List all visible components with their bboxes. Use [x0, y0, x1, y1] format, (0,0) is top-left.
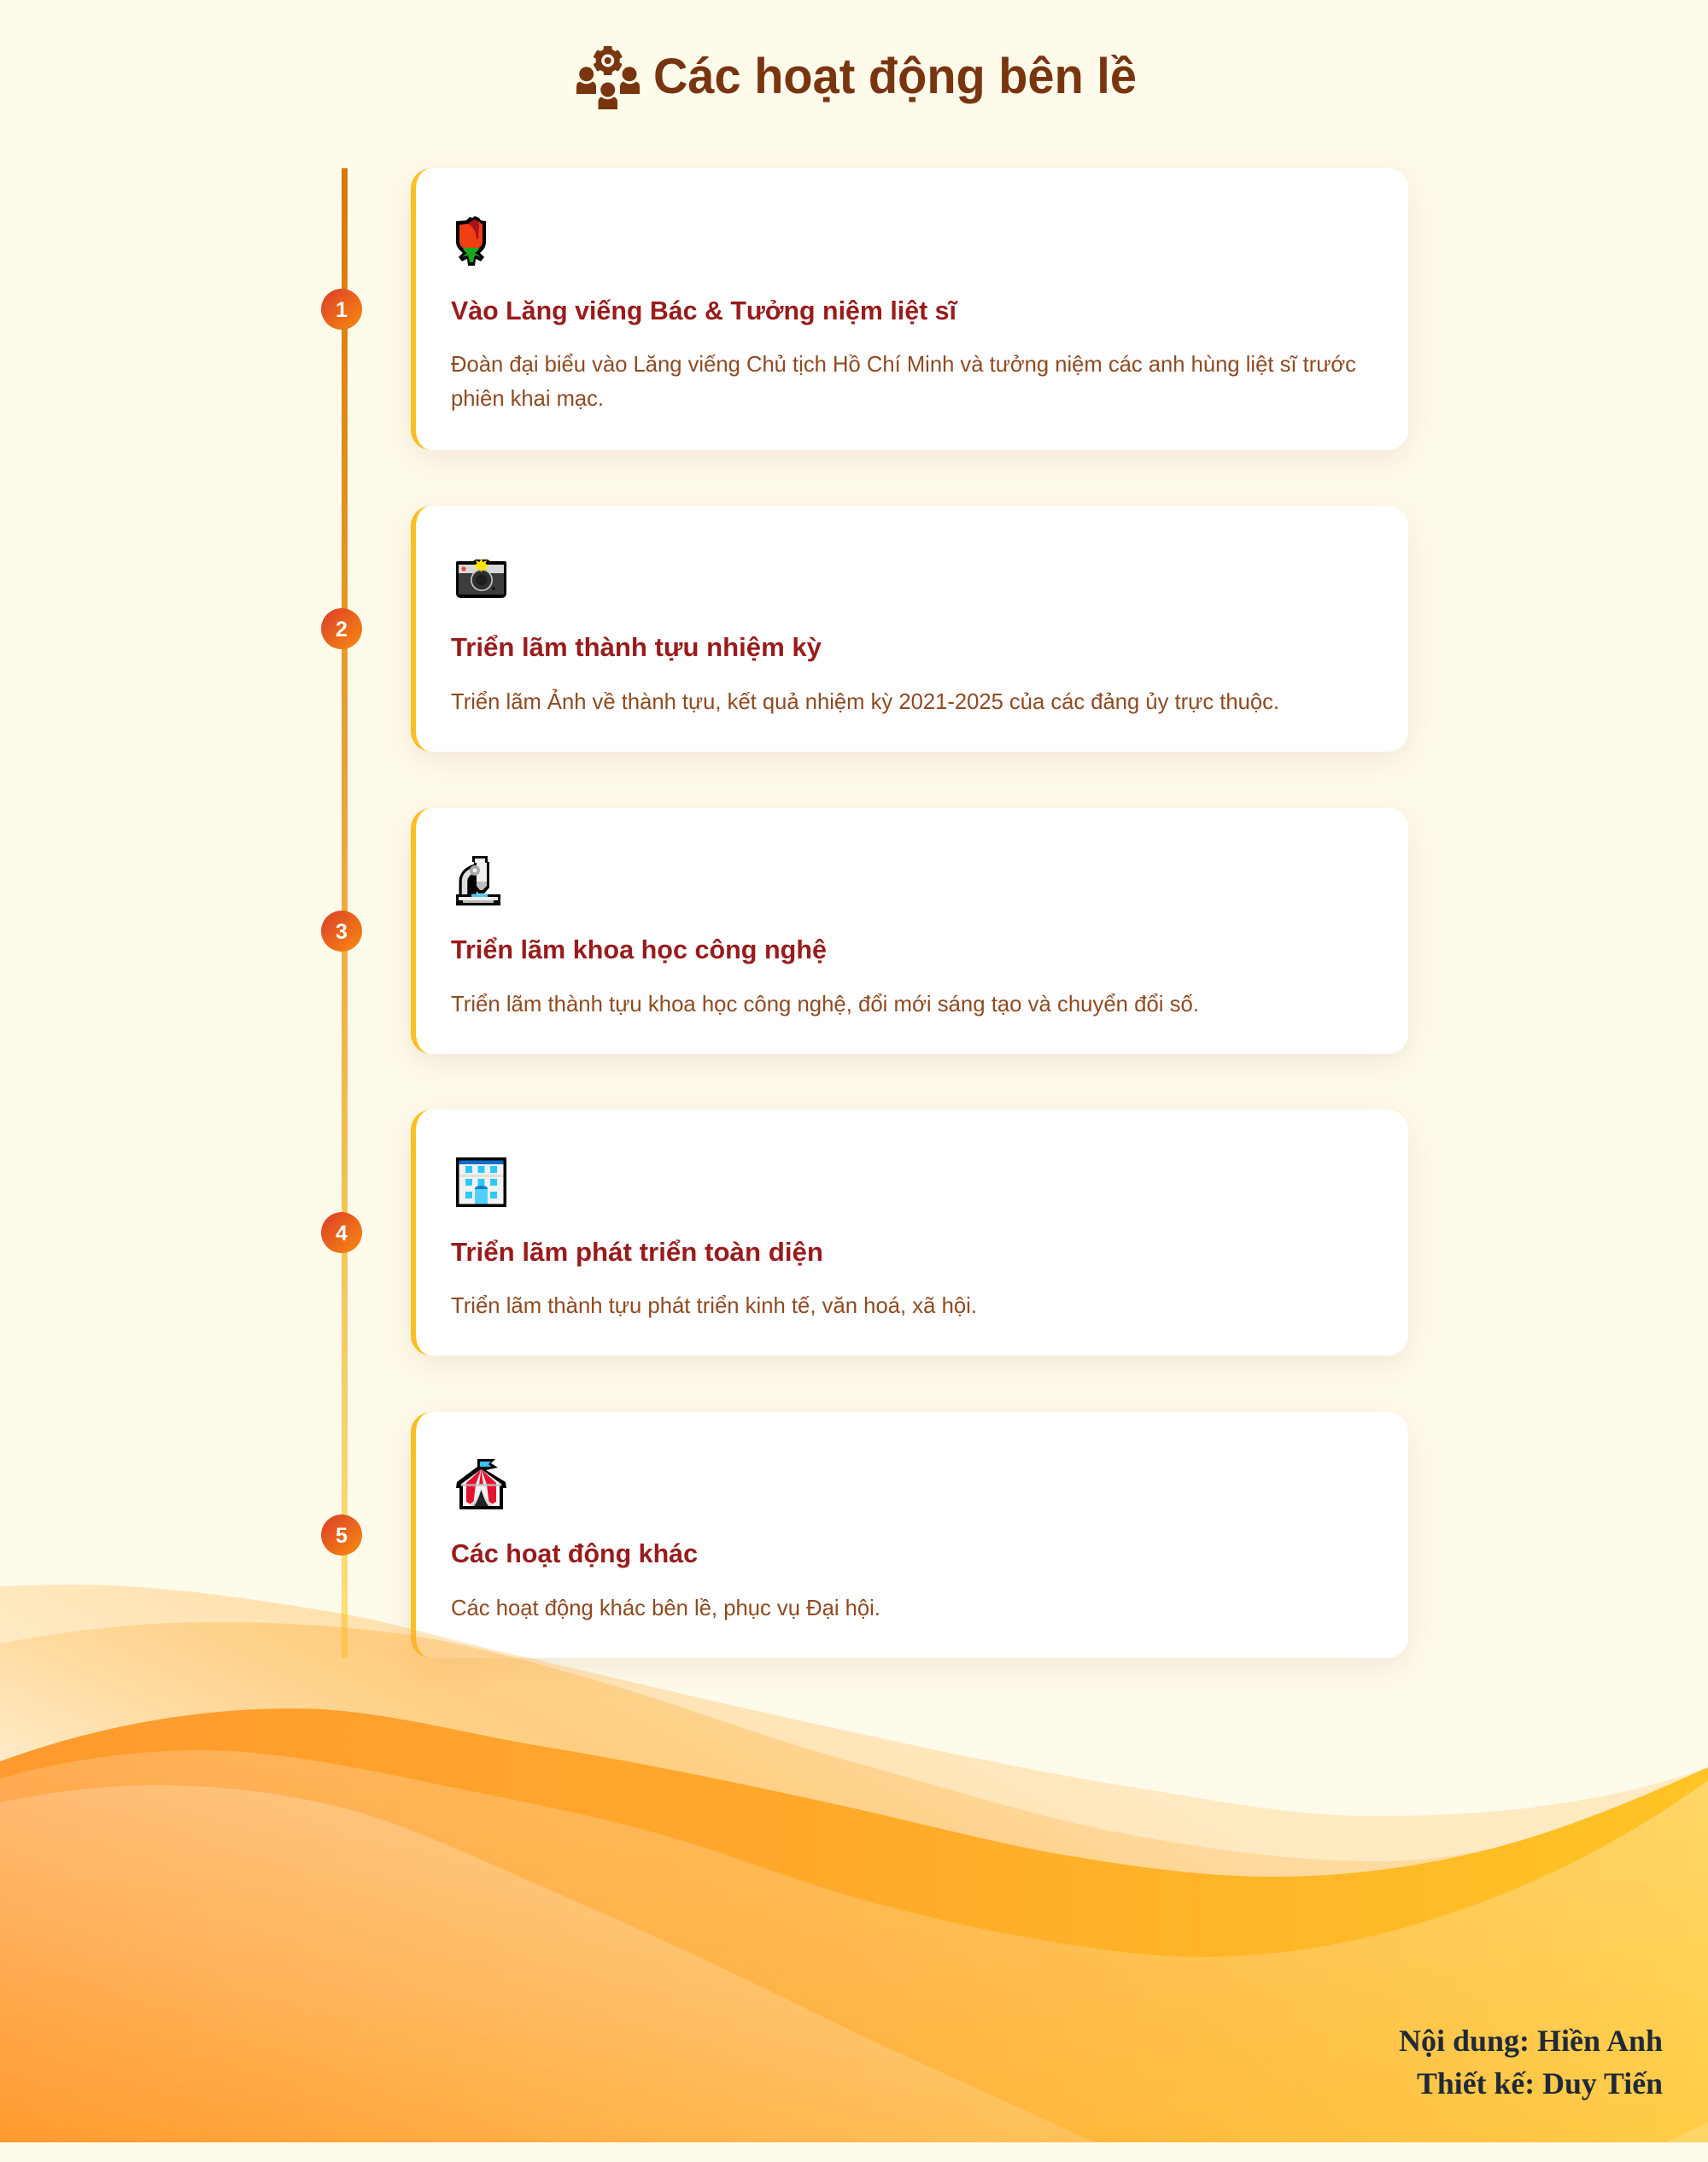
wave layer 5: [0, 1785, 1094, 2142]
step number 4: [321, 1212, 362, 1253]
step number 1: [321, 289, 362, 330]
panel: card 2: [411, 506, 1408, 752]
credits: Thiết kế: Duy Tiến: [1417, 2066, 1663, 2100]
card title: Triển lãm khoa học công nghệ: [451, 935, 827, 964]
icon: building: [456, 1157, 506, 1207]
wave layer 4: [0, 1750, 1708, 2142]
description: Triển lãm Ảnh về thành tựu, kết quả nhiệm kỳ 2021-2025 của các đảng ủy trực thuộc.: [451, 688, 1279, 714]
card title: Triển lãm thành tựu nhiệm kỳ: [451, 632, 822, 662]
credits: Nội dung: Hiền Anh: [1399, 2024, 1663, 2058]
panel: card 5: [411, 1412, 1408, 1658]
icon: circus tent: [456, 1459, 506, 1509]
panel: card 4: [411, 1110, 1408, 1356]
wave corner highlight: [1665, 2123, 1708, 2142]
description: Đoàn đại biểu vào Lăng viếng Chủ tịch Hồ Chí Minh và tưởng niệm các anh hùng liệt sĩ trước: [451, 351, 1356, 377]
card title: Triển lãm phát triển toàn diện: [451, 1237, 823, 1267]
description: Triển lãm thành tựu khoa học công nghệ, đổi mới sáng tạo và chuyển đổi số.: [451, 991, 1199, 1017]
icon: rose: [456, 216, 486, 266]
wave layer 1: [0, 1585, 1708, 2142]
description: Triển lãm thành tựu phát triển kinh tế, văn hoá, xã hội.: [451, 1292, 977, 1318]
icon: people with gear: [576, 46, 640, 109]
description: phiên khai mạc.: [451, 385, 604, 411]
step number 4: 4: [336, 1222, 348, 1245]
description: [451, 351, 1356, 411]
panel: card 3: [411, 808, 1408, 1054]
description: Các hoạt động khác bên lề, phục vụ Đại hội.: [451, 1595, 880, 1620]
step number 3: 3: [336, 920, 348, 944]
wave layer 2: [0, 1622, 1708, 2142]
step number 5: 5: [336, 1524, 348, 1548]
card title: Các hoạt động khác: [451, 1538, 698, 1568]
credits: [1399, 2024, 1663, 2100]
step number 3: [321, 911, 362, 952]
step number 5: [321, 1515, 362, 1556]
card title: Vào Lăng viếng Bác & Tưởng niệm liệt sĩ: [451, 296, 958, 325]
title text: Các hoạt động bên lề: [653, 49, 1137, 104]
wave layer 3: [0, 1708, 1708, 2142]
step number 1: 1: [336, 298, 348, 322]
step number 2: 2: [336, 618, 348, 642]
step number 2: [321, 608, 362, 649]
icon: camera: [456, 559, 506, 598]
icon: microscope: [456, 856, 500, 905]
timeline line: [342, 168, 347, 1658]
panel: card 1: [411, 168, 1408, 450]
heading: title with icon: [576, 46, 1137, 109]
